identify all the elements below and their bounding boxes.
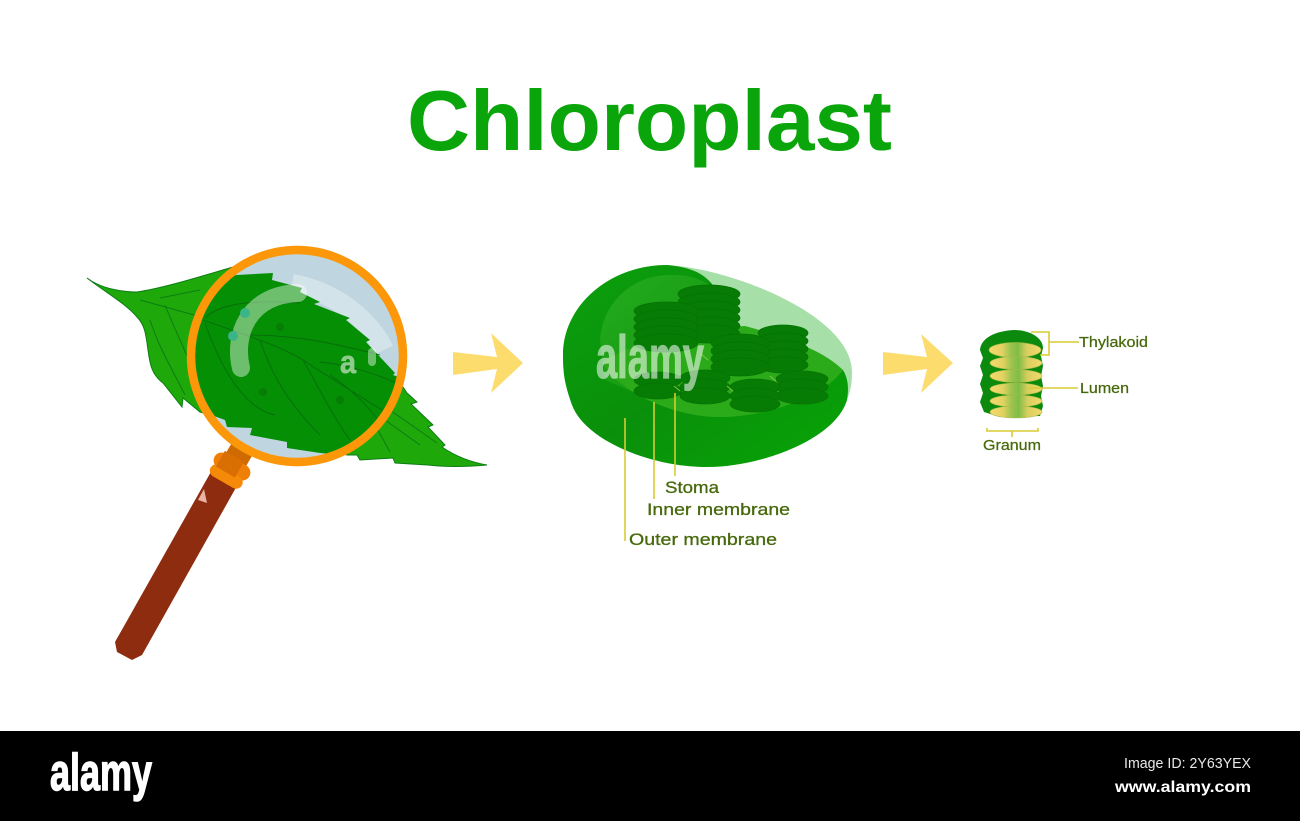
label: inner membrane: Inner membrane (647, 500, 790, 519)
footer bar (0, 731, 1300, 821)
thylakoid stacks (634, 285, 828, 412)
title: Chloroplast (407, 74, 892, 169)
label: outer membrane: Outer membrane (629, 530, 777, 549)
footer logo: alamy (50, 744, 152, 802)
stack E (776, 371, 828, 404)
website: www.alamy.com (1114, 779, 1251, 796)
chloroplast diagram (563, 265, 852, 549)
lumen discs (989, 342, 1042, 418)
stroma floor (602, 326, 843, 417)
granum diagram (980, 330, 1148, 454)
icon: lens glass (191, 250, 403, 462)
outer membrane front (563, 265, 848, 467)
watermark: alamy (596, 324, 704, 391)
leader lines (625, 393, 675, 541)
magnifying glass over leaf (87, 250, 487, 660)
icon: lens ring (191, 250, 403, 462)
magnified leaf: a (340, 344, 356, 380)
stroma lamellae marks (674, 354, 776, 391)
label: thylakoid: Thylakoid (1079, 335, 1148, 351)
label: granum: Granum (983, 438, 1041, 454)
leader lines (987, 332, 1079, 437)
inner membrane wall (600, 275, 742, 400)
icon: magnifier handle (115, 436, 261, 660)
stack B (678, 285, 740, 343)
stack F (730, 379, 780, 412)
granum dark body (980, 330, 1043, 417)
image id: Image ID: 2Y63YEX (1124, 756, 1251, 772)
stack D (711, 334, 769, 376)
magnified leaf (195, 273, 397, 454)
stack G (680, 370, 730, 404)
stack H (634, 372, 682, 399)
arrow: chloroplast to granum (883, 334, 953, 393)
stack A (634, 302, 698, 352)
label: lumen: Lumen (1080, 381, 1129, 397)
stack C (758, 325, 808, 373)
label: stoma: Stoma (665, 478, 720, 497)
arrow: leaf to chloroplast (453, 333, 523, 393)
icon: leaf (87, 265, 487, 466)
outer membrane pale back (563, 265, 852, 467)
